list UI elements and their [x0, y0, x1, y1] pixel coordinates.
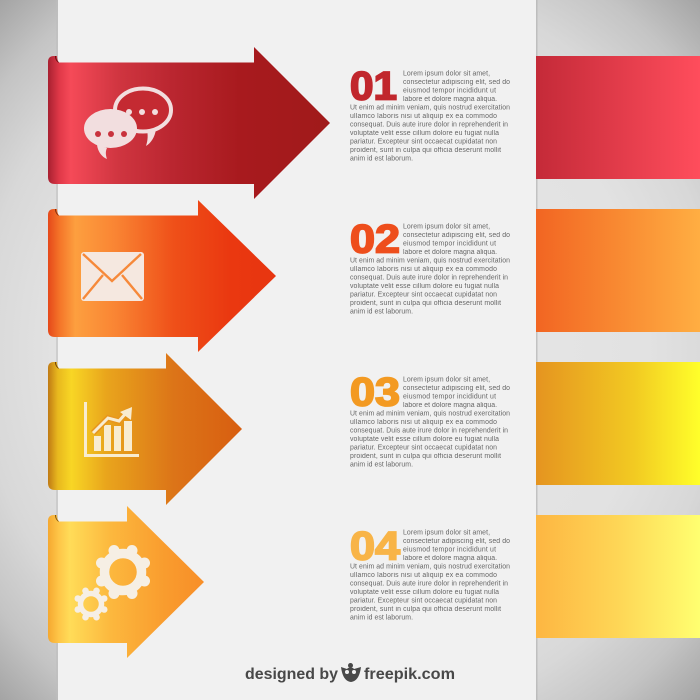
band: yellow	[536, 362, 700, 485]
paragraph 2: proident, sunt in culpa qui officia deserunt mollit	[350, 300, 501, 307]
paragraph 3: consequat. Duis aute irure dolor in reprehenderit in	[350, 428, 508, 434]
paragraph 2: eiusmod tempor incididunt ut	[403, 240, 496, 248]
icon: envelope	[81, 252, 144, 301]
paragraph 2: Lorem ipsum dolor sit amet,	[403, 224, 490, 230]
number 02: 02	[350, 218, 400, 262]
paragraph 2: voluptate velit esse cillum dolore eu fugiat nulla	[350, 283, 499, 290]
footer credit	[245, 663, 455, 683]
paragraph 4: consectetur adipiscing elit, sed do	[403, 538, 510, 545]
icon: speech bubbles	[84, 88, 171, 159]
arrow 2: orange	[48, 200, 276, 352]
paragraph 2: ullamco laboris nisi ut aliquip ex ea commodo	[350, 266, 497, 273]
text block 4	[350, 524, 510, 622]
paragraph 1: anim id est laborum.	[350, 156, 413, 162]
paragraph 1: Lorem ipsum dolor sit amet,	[403, 70, 490, 78]
paragraph 3: proident, sunt in culpa qui officia deserunt mollit	[350, 453, 501, 460]
paragraph 1: consequat. Duis aute irure dolor in reprehenderit in	[350, 122, 508, 128]
paragraph 2	[350, 224, 510, 316]
footer credit: designed by	[245, 666, 338, 683]
panel: white paper sheet	[58, 0, 536, 700]
paragraph 3: voluptate velit esse cillum dolore eu fugiat nulla	[350, 436, 499, 443]
band: red	[536, 56, 700, 179]
paragraph 4: Lorem ipsum dolor sit amet,	[403, 530, 490, 536]
paragraph 1	[350, 70, 510, 162]
paragraph 4: labore et dolore magna aliqua.	[403, 555, 497, 562]
number 01: 01	[350, 64, 397, 108]
paragraph 2: consequat. Duis aute irure dolor in reprehenderit in	[350, 274, 508, 282]
number 04: 04	[350, 524, 401, 568]
paragraph 3: Lorem ipsum dolor sit amet,	[403, 376, 490, 384]
paragraph 3	[350, 376, 510, 468]
paragraph 2: anim id est laborum.	[350, 308, 413, 316]
paragraph 3: pariatur. Excepteur sint occaecat cupidatat non	[350, 444, 497, 452]
paragraph 1: proident, sunt in culpa qui officia deserunt mollit	[350, 147, 501, 154]
paragraph 3: eiusmod tempor incididunt ut	[403, 394, 496, 400]
paragraph 2: Ut enim ad minim veniam, quis nostrud exercitation	[350, 258, 510, 264]
arrow 3: amber	[48, 353, 242, 505]
paragraph 4: consequat. Duis aute irure dolor in reprehenderit in	[350, 580, 508, 588]
paragraph 3: ullamco laboris nisi ut aliquip ex ea commodo	[350, 419, 497, 426]
paragraph 1: ullamco laboris nisi ut aliquip ex ea commodo	[350, 113, 497, 120]
arrow 4: light orange	[48, 506, 204, 658]
number 03: 03	[350, 370, 400, 414]
band: orange	[536, 209, 700, 332]
text block 2	[350, 218, 510, 316]
paragraph 3: anim id est laborum.	[350, 462, 413, 468]
icon: rising bar chart	[84, 402, 139, 457]
paragraph 1: pariatur. Excepteur sint occaecat cupidatat non	[350, 138, 497, 146]
paragraph 2: pariatur. Excepteur sint occaecat cupidatat non	[350, 292, 497, 298]
band: light yellow	[536, 515, 700, 638]
paragraph 3: Ut enim ad minim veniam, quis nostrud exercitation	[350, 410, 510, 418]
arrow 1: red	[48, 47, 330, 199]
paragraph 4	[350, 530, 510, 622]
paragraph 2: labore et dolore magna aliqua.	[403, 249, 497, 256]
paragraph 1: eiusmod tempor incididunt ut	[403, 88, 496, 94]
paragraph 1: labore et dolore magna aliqua.	[403, 96, 497, 103]
paragraph 4: eiusmod tempor incididunt ut	[403, 546, 496, 554]
paragraph 4: Ut enim ad minim veniam, quis nostrud exercitation	[350, 564, 510, 570]
paragraph 1: consectetur adipiscing elit, sed do	[403, 79, 510, 86]
paragraph 1: voluptate velit esse cillum dolore eu fugiat nulla	[350, 130, 499, 137]
paragraph 4: anim id est laborum.	[350, 614, 413, 622]
paragraph 2: consectetur adipiscing elit, sed do	[403, 232, 510, 239]
paragraph 3: consectetur adipiscing elit, sed do	[403, 385, 510, 392]
paragraph 4: proident, sunt in culpa qui officia deserunt mollit	[350, 606, 501, 613]
text block 1	[350, 64, 510, 162]
paragraph 1: Ut enim ad minim veniam, quis nostrud exercitation	[350, 104, 510, 112]
icon: freepik logo	[341, 663, 361, 682]
paragraph 4: ullamco laboris nisi ut aliquip ex ea commodo	[350, 572, 497, 579]
paragraph 4: voluptate velit esse cillum dolore eu fugiat nulla	[350, 589, 499, 596]
text block 3	[350, 370, 510, 468]
paragraph 4: pariatur. Excepteur sint occaecat cupidatat non	[350, 598, 497, 604]
paragraph 3: labore et dolore magna aliqua.	[403, 402, 497, 409]
icon: gears	[74, 545, 150, 620]
footer credit: freepik.com	[364, 666, 455, 683]
